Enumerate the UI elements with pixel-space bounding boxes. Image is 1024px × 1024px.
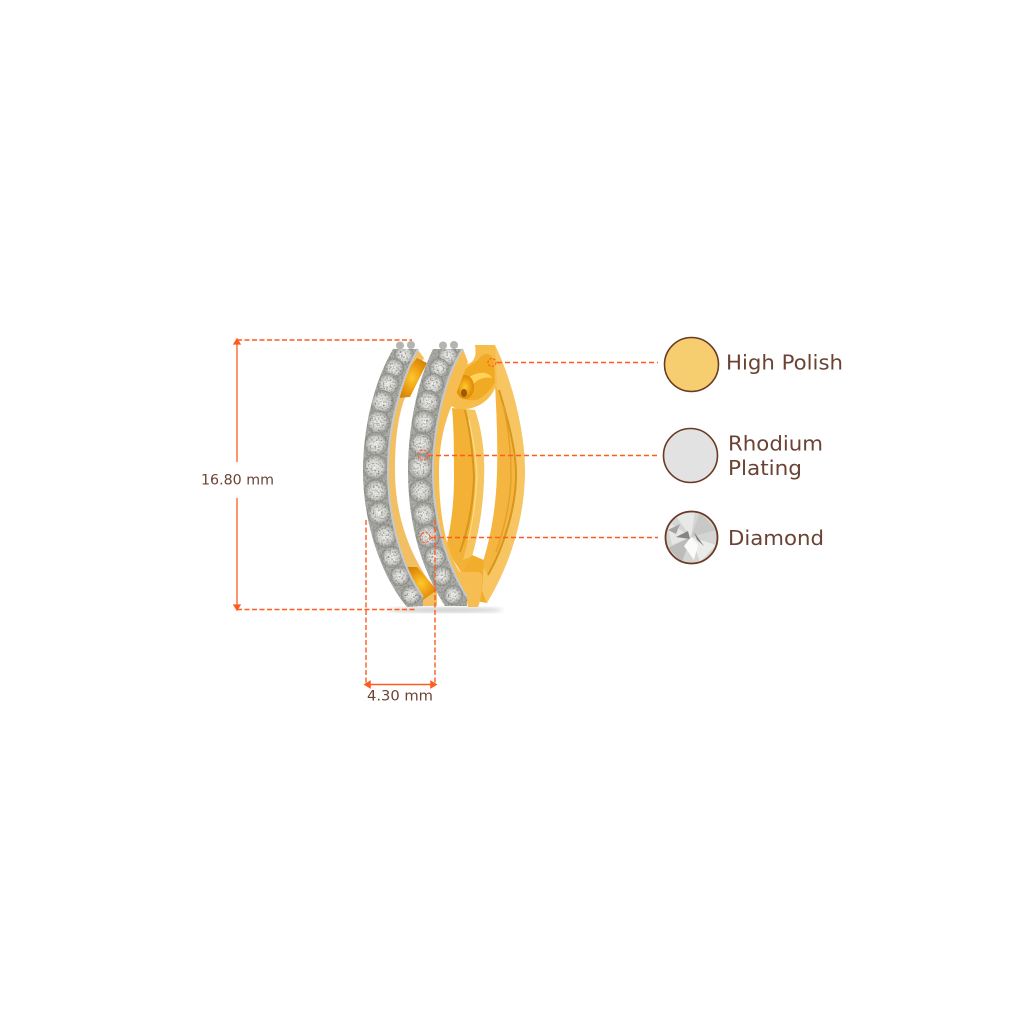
diamond marker (420, 532, 430, 542)
upper vertical arrow (234, 339, 240, 462)
back hoop groove (488, 390, 516, 575)
hinge hole (461, 389, 467, 397)
rear bridge below hoops (462, 555, 487, 603)
diamond swatch (666, 512, 718, 564)
ground shadow (387, 607, 503, 613)
width value: 4.30 mm (367, 688, 433, 704)
rhodium leader (428, 454, 658, 456)
left extension line (365, 520, 367, 685)
back hoop outer band (482, 345, 525, 603)
diamond leader (431, 536, 658, 538)
high polish label: High Polish (726, 350, 843, 374)
legend: diamond (666, 512, 824, 564)
second row top prongs (439, 341, 458, 350)
back hoop groove highlight (496, 405, 511, 552)
hinge disc (446, 345, 497, 409)
first hoop back bracket (397, 358, 427, 398)
gold swatch (664, 338, 718, 392)
back hoop inner strip (482, 383, 515, 575)
rhodium swatch (664, 428, 718, 482)
second row silver rim (433, 349, 467, 597)
second diamond row (408, 349, 467, 606)
plating label: Plating (728, 456, 802, 480)
hinge crescent highlight (468, 373, 492, 386)
hinge inner face (455, 354, 495, 400)
bottom extension line (237, 608, 416, 610)
first row top prongs (396, 341, 415, 350)
width dimension (365, 520, 436, 704)
first hoop gold band (388, 350, 437, 606)
second hoop gold band (433, 349, 482, 607)
rhodium label: Rhodium (728, 432, 823, 456)
diamond label: Diamond (728, 526, 824, 550)
high polish marker (488, 358, 496, 366)
right extension line (434, 520, 436, 685)
leader lines (418, 358, 658, 542)
inner hoop groove (460, 410, 474, 552)
legend: high polish (664, 338, 843, 392)
legend: rhodium plating (664, 428, 823, 482)
first hoop lower bracket (405, 567, 437, 600)
horizontal arrow (365, 682, 436, 688)
inner hoop light strip (463, 410, 484, 560)
first diamond row (363, 349, 423, 607)
lower vertical arrow (234, 498, 240, 610)
earrings illustration (355, 338, 525, 613)
hinge socket (456, 375, 474, 399)
high polish leader (497, 362, 658, 364)
front-facing band inner hoop (446, 408, 484, 574)
height value: 16.80 mm (201, 472, 274, 488)
top extension line (237, 339, 412, 341)
inner hoop groove highlight (468, 420, 477, 540)
first row silver rim (388, 349, 423, 597)
rhodium marker (418, 450, 428, 460)
height dimension (201, 339, 416, 610)
